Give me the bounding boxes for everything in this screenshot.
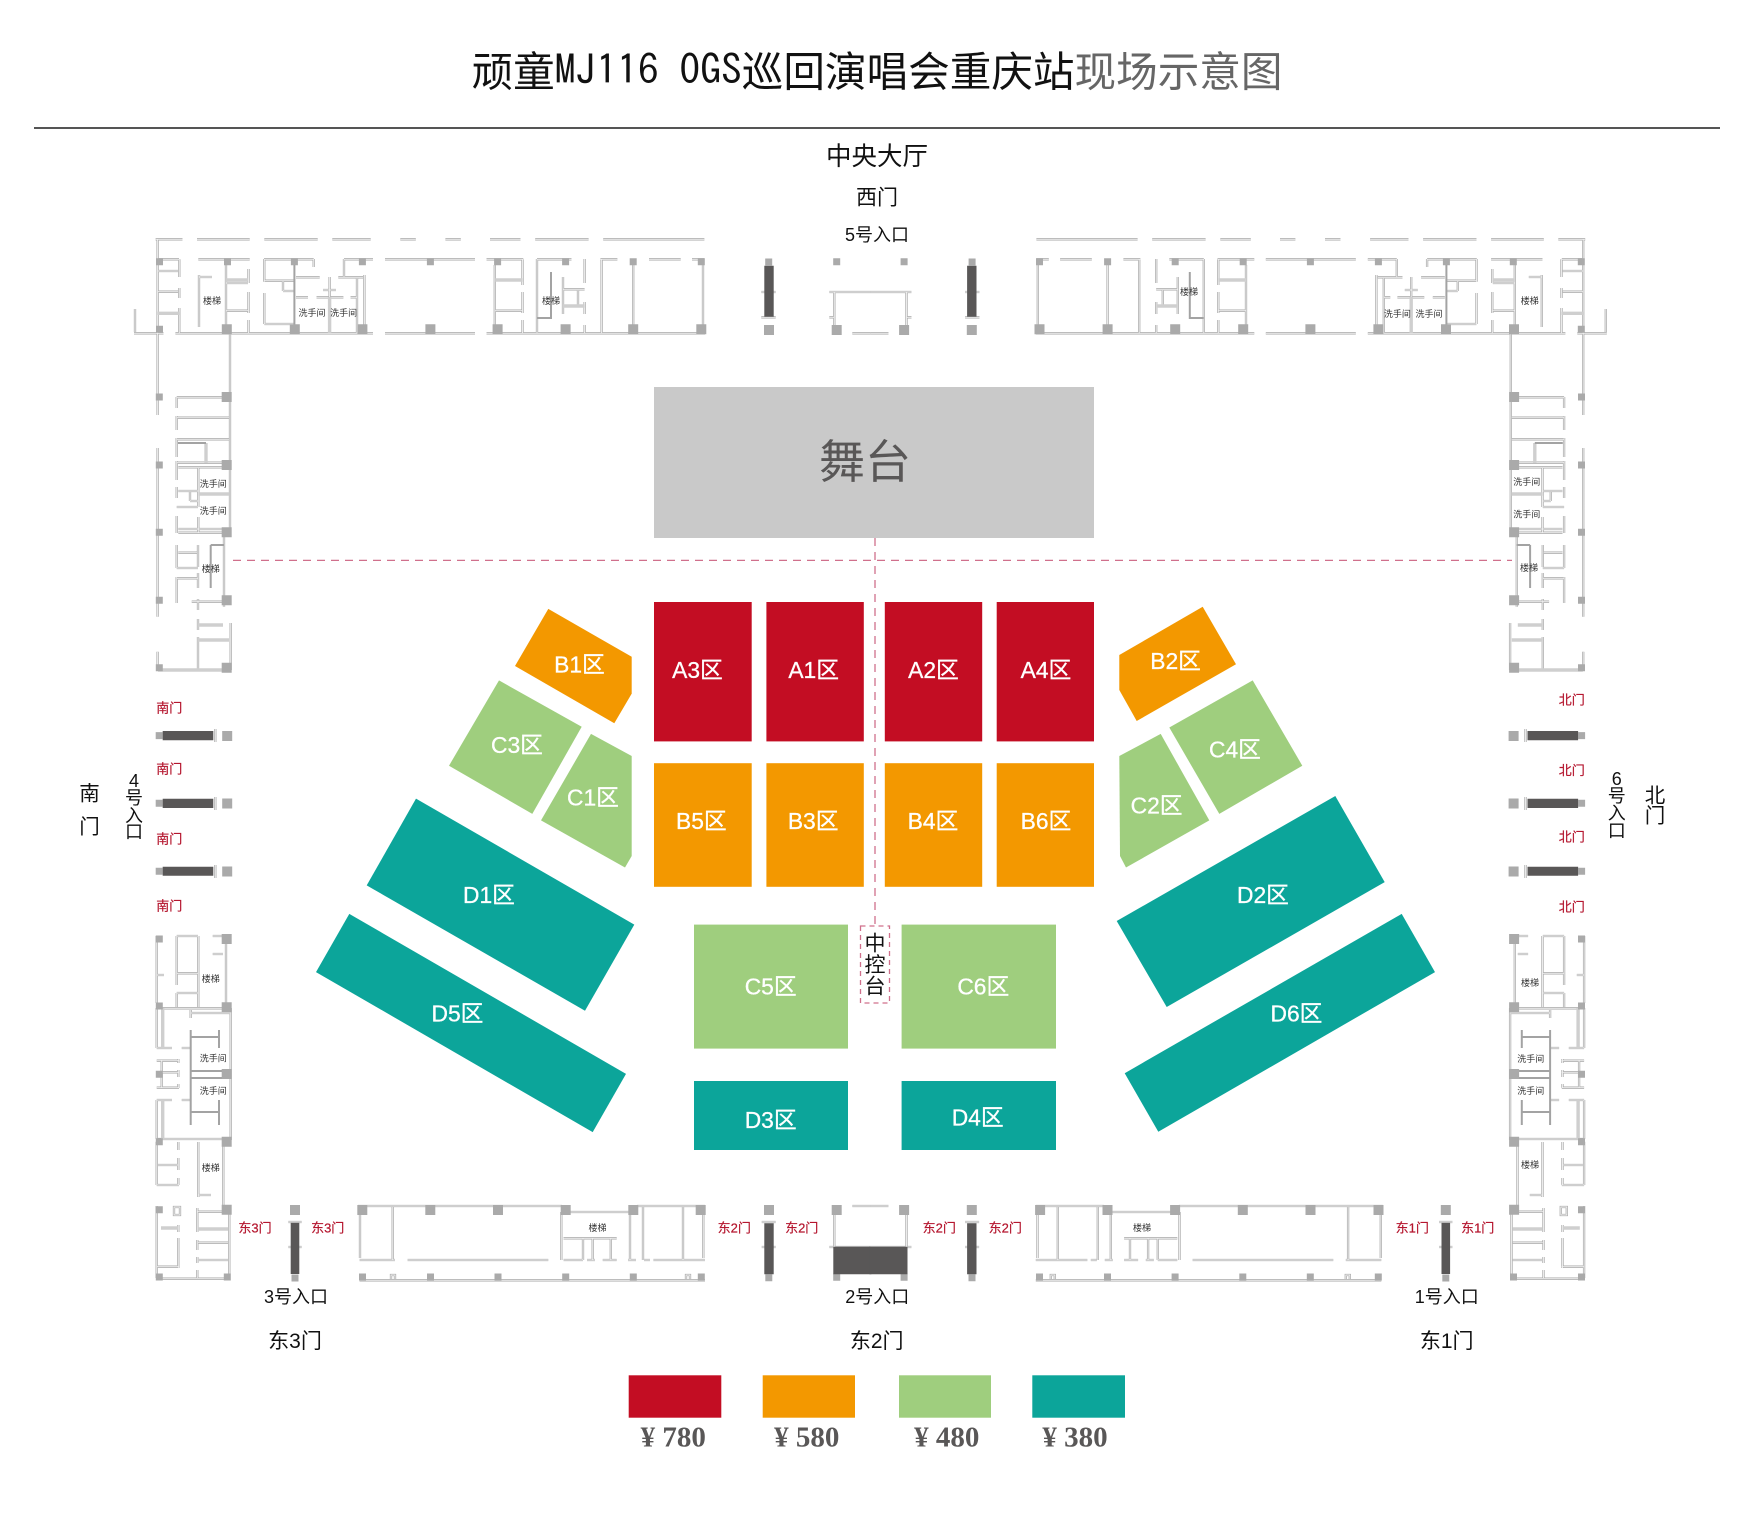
east gate labels: 东3门 xyxy=(311,1220,344,1235)
zone D5: D5区 xyxy=(432,1000,483,1027)
facility labels: 楼梯 xyxy=(1521,977,1539,988)
north gate labels: 门 xyxy=(1645,805,1665,828)
zone C6 xyxy=(902,925,1056,1049)
south gate labels: 南门 xyxy=(156,899,182,914)
top labels: central hall and west gate xyxy=(826,143,928,245)
zone C5 xyxy=(694,925,848,1049)
facility labels: 楼梯 xyxy=(1521,1159,1539,1170)
facility labels: 洗手间 xyxy=(1513,508,1540,519)
north gate labels: 口 xyxy=(1608,821,1626,841)
zone C4 xyxy=(1169,680,1302,814)
zone C1: C1区 xyxy=(567,785,619,811)
zone C2: C2区 xyxy=(1131,792,1183,818)
east gate labels: 东2门 xyxy=(850,1330,904,1353)
east gate labels: 3号入口 xyxy=(264,1287,328,1307)
zone B6 xyxy=(997,763,1094,887)
facility labels: 洗手间 xyxy=(298,307,326,318)
zone B1: B1区 xyxy=(554,652,605,678)
zone D1: D1区 xyxy=(463,882,515,908)
seating zones xyxy=(316,602,1435,1150)
zone B2 xyxy=(1119,607,1236,721)
facility labels: 洗手间 xyxy=(200,478,227,489)
central control desk xyxy=(860,926,890,1003)
central control desk: 中 xyxy=(864,933,886,956)
south gate labels: 号 xyxy=(125,788,143,808)
south gate labels: 南门 xyxy=(156,831,182,846)
zone D5 xyxy=(316,914,626,1132)
legend: 780 xyxy=(629,1375,721,1454)
zone D4 xyxy=(902,1081,1056,1150)
north gate labels: 北门 xyxy=(1559,693,1585,708)
facility labels: 楼梯 xyxy=(542,295,560,306)
top labels: central hall and west gate: 中央大厅 xyxy=(826,143,928,171)
top labels: central hall and west gate: 西门 xyxy=(856,187,898,210)
legend: 780: ¥ 780 xyxy=(641,1422,706,1454)
zone A4 xyxy=(997,602,1094,741)
legend: 380 xyxy=(1032,1375,1125,1454)
east gate labels: 东1门 xyxy=(1420,1330,1474,1353)
facility labels: 楼梯 xyxy=(202,563,220,574)
facility labels: 洗手间 xyxy=(1513,476,1540,487)
facility labels: 楼梯 xyxy=(203,295,221,306)
south gate labels: 南门 xyxy=(156,762,182,777)
north gate labels: 北门 xyxy=(1559,763,1585,778)
east gate labels: 东3门 xyxy=(268,1330,322,1353)
facility labels: 洗手间 xyxy=(200,1053,227,1064)
zone A3: A3区 xyxy=(672,657,723,683)
facility labels: 洗手间 xyxy=(200,505,227,516)
dashed centre lines xyxy=(233,538,1512,926)
facility labels: 楼梯 xyxy=(202,1162,220,1173)
zone C3 xyxy=(449,680,582,814)
facility labels: 洗手间 xyxy=(330,307,357,318)
price legend xyxy=(629,1375,1125,1454)
zone A4: A4区 xyxy=(1021,657,1071,683)
east gate labels: 东2门 xyxy=(785,1220,818,1235)
south gate labels xyxy=(79,700,182,914)
north gate labels: 6 xyxy=(1612,769,1622,789)
legend: 480: ¥ 480 xyxy=(914,1422,979,1454)
floor plan: right half of venue walls xyxy=(869,239,1607,1281)
zone B6: B6区 xyxy=(1021,808,1071,834)
title: 顽童MJ116 OGS巡回演唱会重庆站现场示意图 xyxy=(472,38,1282,98)
facility labels xyxy=(200,286,1544,1233)
south gate labels: 口 xyxy=(125,822,143,842)
facility labels: 楼梯 xyxy=(1520,562,1538,573)
facility labels: 楼梯 xyxy=(1133,1222,1151,1233)
east gate labels: 东2门 xyxy=(718,1220,751,1235)
north gate labels: 北门 xyxy=(1559,830,1585,845)
east gate labels: 1号入口 xyxy=(1415,1287,1479,1307)
zone C1 xyxy=(541,734,632,868)
east gate labels: 东2门 xyxy=(989,1220,1022,1235)
zone C6: C6区 xyxy=(957,974,1009,1000)
legend: 580 xyxy=(763,1375,855,1454)
facility labels: 洗手间 xyxy=(1517,1085,1544,1096)
north gate labels xyxy=(1559,693,1665,915)
facility labels: 楼梯 xyxy=(1180,286,1198,297)
zone D3: D3区 xyxy=(745,1107,797,1133)
south gate labels: 4 xyxy=(129,771,139,791)
north gate labels: 号 xyxy=(1608,786,1626,806)
central control desk: 控 xyxy=(864,954,886,977)
south gate labels: 门 xyxy=(79,815,100,838)
legend: 580: ¥ 580 xyxy=(774,1422,839,1454)
central control desk: 台 xyxy=(864,976,886,999)
legend: 480 xyxy=(899,1375,991,1454)
south gate labels: 入 xyxy=(125,806,143,826)
zone D2: D2区 xyxy=(1237,882,1289,908)
facility labels: 洗手间 xyxy=(1415,308,1443,319)
top labels: central hall and west gate: 5号入口 xyxy=(845,225,909,245)
north gate labels: 入 xyxy=(1608,804,1626,824)
south gate labels: 南门 xyxy=(156,700,182,715)
zone C5: C5区 xyxy=(745,974,797,1000)
floor plan: left half of venue walls xyxy=(134,239,871,1281)
zone B5: B5区 xyxy=(676,808,727,834)
north gate labels: 北 xyxy=(1645,785,1665,808)
zone B3: B3区 xyxy=(788,808,839,834)
legend: 380: ¥ 380 xyxy=(1042,1422,1108,1454)
east gate labels: 东2门 xyxy=(923,1220,956,1235)
east gate labels: 2号入口 xyxy=(845,1287,909,1307)
zone C3: C3区 xyxy=(491,732,543,758)
zone A1 xyxy=(766,602,864,741)
east gate labels: 东1门 xyxy=(1461,1220,1494,1235)
north gate labels: 北门 xyxy=(1559,900,1585,915)
zone A2: A2区 xyxy=(908,657,959,683)
zone B4 xyxy=(885,763,982,887)
east gate labels xyxy=(238,1220,1494,1353)
zone B1 xyxy=(515,609,632,723)
facility labels: 洗手间 xyxy=(1384,308,1411,319)
stage: 舞台 xyxy=(819,436,911,488)
zone B2: B2区 xyxy=(1150,648,1201,674)
facility labels: 洗手间 xyxy=(1517,1053,1544,1064)
zone A3 xyxy=(654,602,752,741)
facility labels: 楼梯 xyxy=(202,973,220,984)
facility labels: 洗手间 xyxy=(200,1085,227,1096)
facility labels: 楼梯 xyxy=(1521,295,1539,306)
zone B4: B4区 xyxy=(908,808,958,834)
stage xyxy=(654,387,1094,538)
south gate labels: 南 xyxy=(79,783,100,806)
zone C4: C4区 xyxy=(1209,737,1261,763)
zone D2 xyxy=(1117,796,1385,1007)
zone C2 xyxy=(1119,734,1209,868)
east gate labels: 东1门 xyxy=(1396,1220,1429,1235)
zone D6: D6区 xyxy=(1271,1000,1322,1027)
facility labels: 楼梯 xyxy=(588,1222,607,1233)
zone A2 xyxy=(885,602,982,741)
zone D4: D4区 xyxy=(952,1105,1004,1131)
zone A1: A1区 xyxy=(788,657,839,683)
zone B5 xyxy=(654,763,752,887)
zone B3 xyxy=(766,763,864,887)
zone D1 xyxy=(367,799,634,1011)
zone D6 xyxy=(1125,914,1435,1132)
east gate labels: 东3门 xyxy=(238,1220,272,1235)
zone D3 xyxy=(694,1081,848,1150)
